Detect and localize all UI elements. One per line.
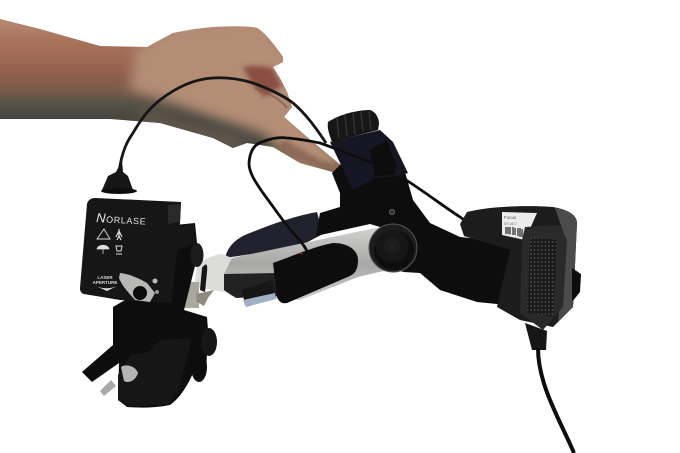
umbrella icon: [97, 245, 109, 254]
top adjustment knob: [328, 110, 379, 142]
cable: top loop from control box: [119, 78, 326, 172]
person icon: [116, 229, 122, 240]
headband padded strap: [225, 212, 323, 258]
storage icon: [116, 246, 122, 254]
warning triangle icon: [97, 229, 110, 239]
centre round pivot knob: [369, 224, 417, 272]
laser delivery unit: APERTURE: [93, 280, 117, 285]
hand and forearm: [0, 19, 340, 172]
silver thumb pins: [121, 365, 138, 382]
headband metal rail: [220, 227, 388, 300]
cable: second loop over yoke to rear box: [249, 138, 522, 257]
index finger underside: [273, 140, 336, 172]
black yoke frame: [316, 130, 523, 305]
rear battery housing: SN 66-7: [504, 222, 517, 226]
dark band beneath rail: [224, 273, 278, 298]
cylindrical laser module: [242, 243, 358, 307]
control box: [80, 198, 181, 303]
side knob upper: [190, 243, 204, 267]
padded top strap: [330, 130, 408, 190]
finger crease shadow: [243, 66, 282, 97]
cable strain relief: [102, 160, 133, 190]
aperture label: LASER: [97, 275, 113, 280]
hand lower shadow: [136, 111, 250, 148]
laser delivery unit: [80, 160, 217, 408]
front side knobs: [201, 328, 217, 356]
cable clip: [370, 140, 397, 177]
rear battery housing: Focus: [504, 215, 517, 220]
brand name: NORLASE: [96, 210, 147, 228]
rear battery housing: [460, 206, 581, 330]
main upright body and lower housing: [82, 223, 208, 408]
bracket linking rail to laser unit: [183, 254, 232, 308]
silver lever: [119, 273, 155, 302]
power cable: [525, 323, 574, 453]
hand lighter tone: [130, 20, 350, 170]
rear housing label: [502, 212, 537, 240]
speaker grille panel: [520, 225, 567, 330]
